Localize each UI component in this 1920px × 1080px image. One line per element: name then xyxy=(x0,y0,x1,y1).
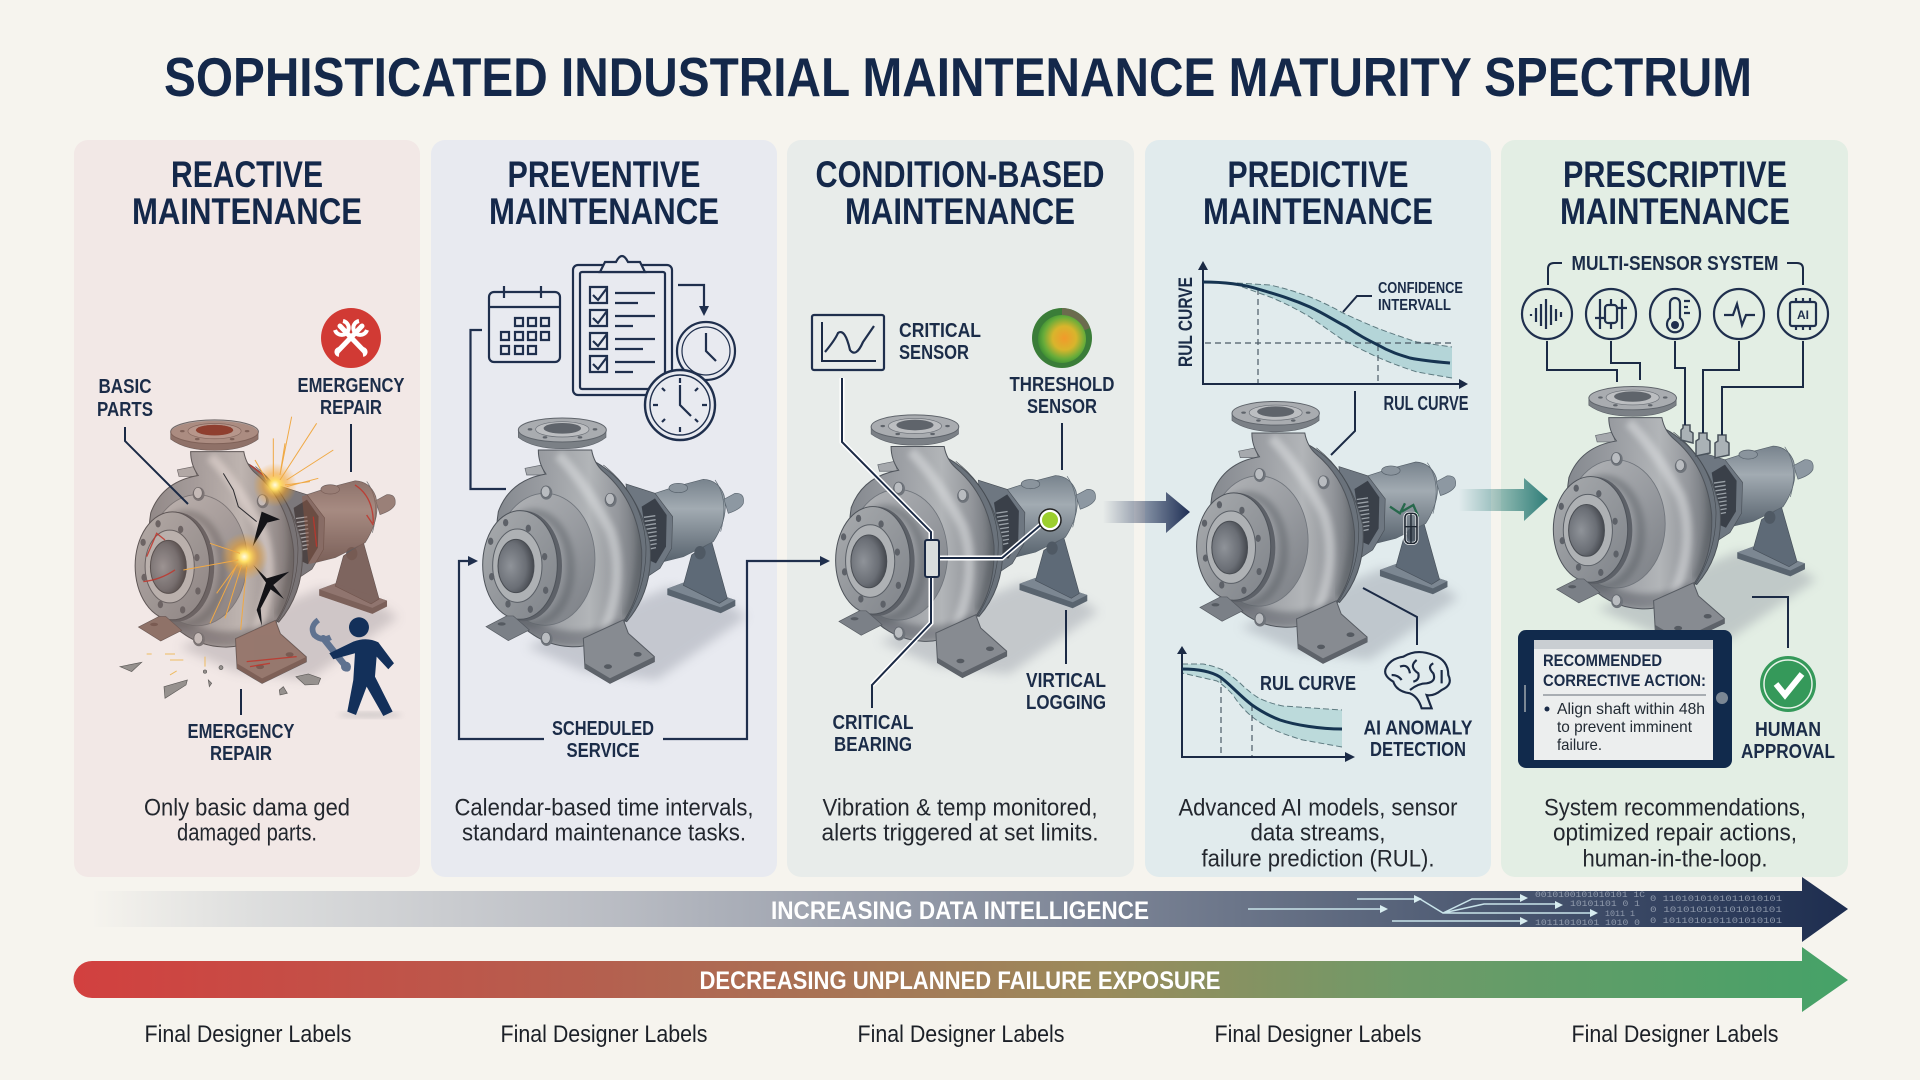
heading: predictive xyxy=(1203,154,1433,232)
description: data streams, xyxy=(1250,820,1386,846)
heading: predictive: MAINTENANCE xyxy=(1203,191,1433,232)
heading: preventive xyxy=(489,154,719,232)
icon: wrench alert xyxy=(321,308,381,368)
labels: REPAIR xyxy=(320,397,382,419)
labels xyxy=(97,375,405,765)
pump illustration xyxy=(483,418,747,683)
connector and label: AI anomaly detection: AI ANOMALY xyxy=(1364,718,1473,740)
icon: clipboard checklist xyxy=(573,256,672,395)
description: optimized repair actions, xyxy=(1553,820,1797,846)
footer labels: Final Designer Labels xyxy=(1214,1021,1422,1048)
icon: worker with wrench xyxy=(313,617,402,718)
description: Only basic dama ged xyxy=(144,794,350,822)
label: vertical axis: RUL CURVE xyxy=(1176,277,1197,367)
label: human approval xyxy=(1741,719,1835,763)
rust and red cracks xyxy=(143,465,373,667)
tablet: recommended action xyxy=(1518,630,1732,768)
damaged pump illustration xyxy=(135,417,398,683)
description: human-in-the-loop. xyxy=(1582,846,1768,872)
heading: prescriptive: MAINTENANCE xyxy=(1560,191,1790,232)
description: standard maintenance tasks. xyxy=(462,820,746,846)
cracks xyxy=(223,473,289,626)
label: scheduled service xyxy=(552,718,654,762)
icon: monitor chart xyxy=(812,315,884,370)
panel: prescriptive maintenance xyxy=(1501,140,1848,877)
description xyxy=(822,794,1098,846)
labels: LOGGING xyxy=(1026,692,1106,714)
arrow label: DECREASING UNPLANNED FAILURE EXPOSURE xyxy=(700,967,1220,995)
label: multi-sensor system xyxy=(1548,253,1803,285)
sensor attachment xyxy=(1390,503,1418,543)
label: confidence interval: CONFIDENCE xyxy=(1378,280,1463,297)
panel: predictive maintenance xyxy=(1145,140,1491,877)
heading: condition-based: CONDITION-BASED xyxy=(816,154,1104,195)
icon: threshold indicator xyxy=(1032,308,1092,368)
label: human approval: HUMAN xyxy=(1755,719,1821,741)
label: lower curve: RUL CURVE xyxy=(1260,673,1356,695)
labels: VIRTICAL xyxy=(1026,670,1106,692)
description xyxy=(144,794,350,846)
panel: preventive maintenance xyxy=(431,140,777,877)
data stream lines xyxy=(1248,894,1598,925)
footer labels: Final Designer Labels xyxy=(500,1021,708,1048)
footer labels: Final Designer Labels xyxy=(1572,1021,1778,1048)
heading: reactive: REACTIVE xyxy=(171,154,323,195)
sensor wiring xyxy=(1547,341,1803,435)
label: confidence interval xyxy=(1343,280,1463,314)
binary texture: 0010100101010101 1C xyxy=(1535,891,1645,900)
description: Calendar-based time intervals, xyxy=(454,794,754,822)
icon: AI chip: AI xyxy=(1797,308,1809,322)
pump illustration xyxy=(1197,401,1459,663)
icon: calendar xyxy=(489,286,560,362)
panel: reactive maintenance xyxy=(74,140,420,877)
binary texture: 10101101 0 1 xyxy=(1570,900,1640,909)
arrow label: INCREASING DATA INTELLIGENCE xyxy=(771,897,1149,925)
footer labels: Final Designer Labels xyxy=(144,1021,352,1048)
chart: lower RUL curve xyxy=(1177,646,1356,762)
icon: temperature sensor xyxy=(1650,289,1700,339)
labels: BASIC xyxy=(98,376,152,398)
tablet: recommended action: to prevent imminent xyxy=(1557,719,1693,736)
footer labels: Final Designer Labels xyxy=(858,1021,1064,1048)
icon: pulse sensor xyxy=(1714,289,1764,339)
labels: SENSOR xyxy=(1027,396,1097,418)
labels: SENSOR xyxy=(899,342,969,364)
description: damaged parts. xyxy=(177,820,317,846)
description xyxy=(454,794,754,846)
binary texture: 0 101010101101010101 xyxy=(1650,906,1782,915)
sensor studs xyxy=(1681,425,1729,458)
tablet: recommended action: failure. xyxy=(1557,737,1602,754)
service loop connector xyxy=(459,556,830,739)
description: alerts triggered at set limits. xyxy=(822,820,1098,846)
labels: EMERGENCY xyxy=(298,375,405,397)
heading: preventive: PREVENTIVE xyxy=(508,154,700,195)
pump illustration xyxy=(836,415,1099,678)
icon: acoustic sensor xyxy=(1522,289,1572,339)
debris xyxy=(120,662,321,698)
arrow: decreasing unplanned failure exposure xyxy=(74,947,1848,1012)
heading: prescriptive: PRESCRIPTIVE xyxy=(1563,154,1787,195)
icon: clocks xyxy=(645,285,735,440)
binary texture: 0 1101010101011010101 xyxy=(1650,895,1782,904)
label: scheduled service: SCHEDULED xyxy=(552,718,654,740)
labels: BEARING xyxy=(834,734,912,756)
tablet: recommended action: Align shaft within 48h xyxy=(1557,701,1705,718)
connector and label: AI anomaly detection: DETECTION xyxy=(1370,739,1466,761)
heading: reactive xyxy=(132,154,362,232)
label: human approval: APPROVAL xyxy=(1741,741,1835,763)
label: confidence interval: INTERVALL xyxy=(1378,297,1451,314)
labels: THRESHOLD xyxy=(1010,374,1114,396)
heading: reactive: MAINTENANCE xyxy=(132,191,362,232)
labels: REPAIR xyxy=(210,743,272,765)
description: Vibration & temp monitored, xyxy=(822,794,1098,822)
heading: predictive: PREDICTIVE xyxy=(1228,154,1408,195)
pump illustration xyxy=(1553,386,1816,644)
arrow: teal between panels xyxy=(1459,478,1548,521)
icon: human approval check xyxy=(1752,597,1816,712)
sensor wiring xyxy=(842,378,1066,708)
connector and label: AI anomaly detection xyxy=(1363,588,1473,761)
arrow: navy between panels xyxy=(1103,492,1190,533)
tablet: recommended action: CORRECTIVE ACTION: xyxy=(1543,671,1706,690)
binary texture xyxy=(1535,891,1782,928)
heading: preventive: MAINTENANCE xyxy=(489,191,719,232)
binary texture: 10111010101 1010 0 xyxy=(1535,919,1640,928)
labels: PARTS xyxy=(97,399,153,421)
label: RUL curve xyxy=(1331,391,1468,455)
description: failure prediction (RUL). xyxy=(1202,846,1434,872)
binary texture: 0 1011010101101010101 xyxy=(1650,917,1782,926)
description: System recommendations, xyxy=(1544,794,1806,822)
sparks xyxy=(147,417,333,675)
labels: CRITICAL xyxy=(832,712,914,734)
icon: AI chip xyxy=(1778,289,1828,339)
description xyxy=(1178,794,1458,872)
labels: EMERGENCY xyxy=(188,721,295,743)
sensor icons row xyxy=(1522,289,1828,339)
heading: condition-based xyxy=(816,154,1104,232)
label: RUL curve: RUL CURVE xyxy=(1384,393,1468,415)
description xyxy=(1544,794,1806,872)
description: Advanced AI models, sensor xyxy=(1178,794,1458,822)
heading: prescriptive xyxy=(1560,154,1790,232)
footer labels xyxy=(144,1021,1778,1048)
label: scheduled service: SERVICE xyxy=(566,740,640,762)
chart: RUL curve with confidence band xyxy=(1176,261,1468,389)
arrow: increasing data intelligence xyxy=(90,877,1848,942)
label: multi-sensor system: MULTI-SENSOR SYSTEM xyxy=(1572,253,1778,275)
heading: condition-based: MAINTENANCE xyxy=(845,191,1075,232)
icon: vibration sensor xyxy=(1586,289,1636,339)
tablet: recommended action: RECOMMENDED xyxy=(1543,651,1662,670)
leader lines xyxy=(125,424,351,715)
calendar connector xyxy=(470,330,506,489)
binary texture: 1011 1 xyxy=(1605,910,1635,919)
icon: AI brain xyxy=(1385,652,1450,708)
labels xyxy=(832,320,1114,756)
labels: CRITICAL xyxy=(899,320,981,342)
panel: condition-based maintenance xyxy=(787,140,1134,877)
